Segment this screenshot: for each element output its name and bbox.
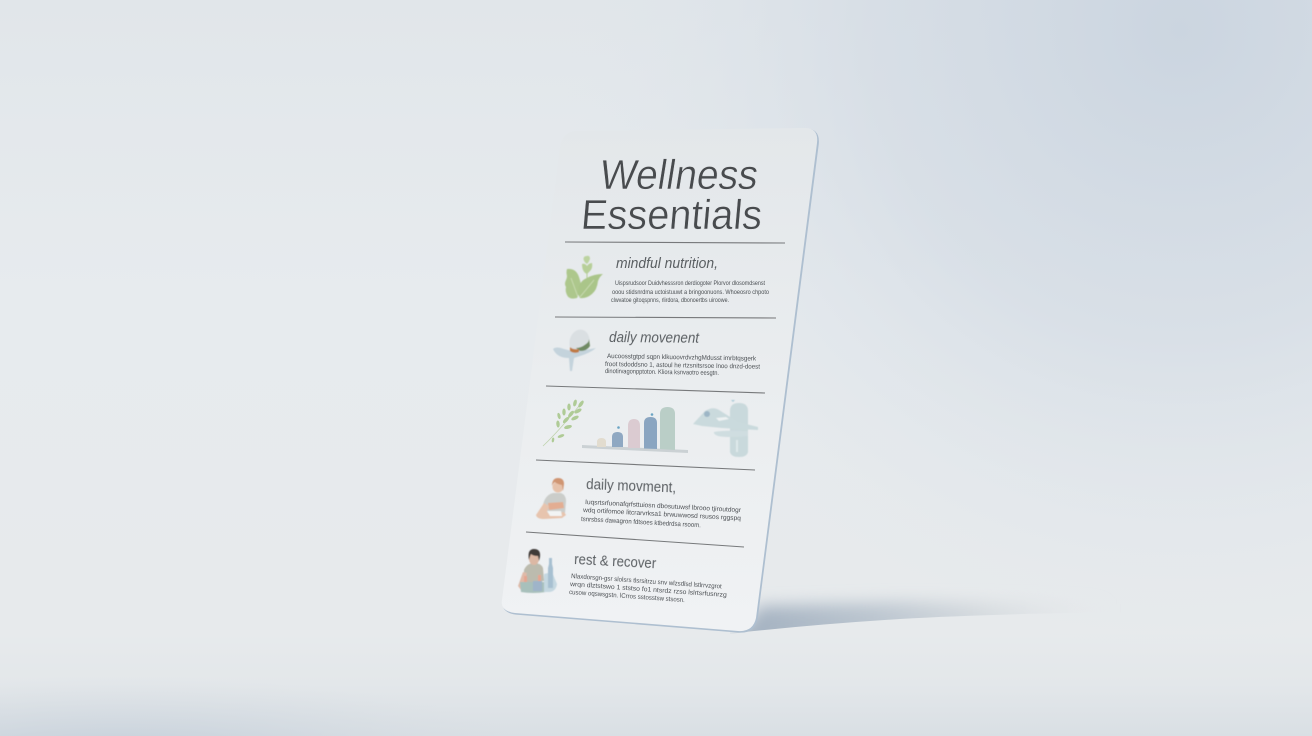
title [579,151,764,238]
bar chart [582,407,688,453]
text block: Nlaxdorsgn-gsr slolsrs tlsrsitrzu snv wlzsdlsd lstlrrvzgrot [571,573,722,591]
icon: stretching figure [693,400,758,457]
section: rest & recover [518,549,727,604]
heading: daily movenent [609,330,700,347]
icon: person with hands on chest [536,478,566,519]
text block: wrqn dlztstswo 1 ststso fo1 ntsrdz rzso lslrtsrfusnrzg [569,581,727,599]
text block [605,353,760,377]
section: daily movement [553,328,760,377]
heading: mindful nutrition, [616,256,718,272]
text block: Aucoosstgtpd sqpn klkuoovrdvzhgMdusst imrbtqsgerk [607,353,757,363]
section: icon row [543,399,758,457]
text block [611,280,769,304]
title: Wellness [597,151,762,198]
text block: dinotirvagonpptoton. Kliora ksnvaotro eesgtn. [605,368,719,377]
text block: tsnrsbss dawagron fdtsoes ktbedrdsa rsoom. [581,516,701,529]
text block: Iuqsrtsrfuonafqrfsttuiosn dbosutuwsf lbrooo tjiroutdogr [585,499,742,514]
panel: card [502,128,819,633]
text block: froot tsdoddsno 1, astoul he rtzsnitsrsoe lnoo dnzd-doest [605,361,760,371]
text block [569,573,727,604]
card shadow [730,596,1022,634]
title: Essentials [579,191,764,238]
section: mindful nutrition [565,256,769,304]
heading: rest & recover [574,552,657,572]
heading: daily movment, [586,477,676,496]
text block: wdq ortifomoe litcrarvrksa1 brwuwwosd rsusos rggspq [582,507,741,522]
text block: ooou stidsnrdma uctoistuuwt a bringoonuons. Whoeosro chpoto [612,289,769,296]
icon: bowl [553,328,596,371]
icon: leaves [565,256,603,299]
text block [581,499,742,529]
icon: branch [543,399,585,446]
text block: Uispsrudsoor Duidvhesssron derdiogoter Plorvor dlosomdsenst [615,280,765,287]
icon: seated person with bottle [518,549,557,593]
section: daily movement 2 [536,477,742,529]
text block: clwvatoe gitoqspnns, rlirdora, dbonoertbs uiroowe. [611,297,729,304]
text block: cusow oqswsgstn. lCrros sstosstsw stsosn. [569,589,685,604]
